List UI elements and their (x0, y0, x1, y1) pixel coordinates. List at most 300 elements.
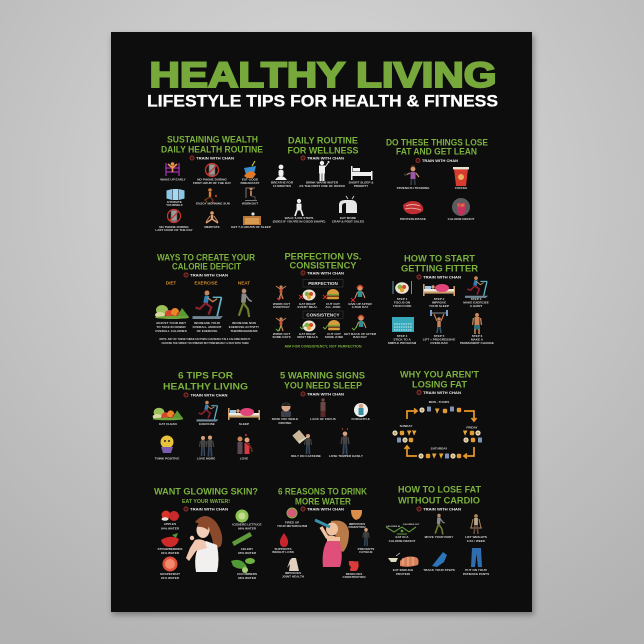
label: BREAKFAST (241, 181, 260, 185)
subtitle: LIFESTYLE TIPS FOR HEALTH & FITNESS (147, 92, 498, 110)
label (348, 522, 366, 529)
brand: TRAIN WITH CHAN (307, 155, 344, 160)
icon: protein (388, 553, 419, 567)
label: 84% WATER (161, 526, 180, 530)
label: 96% WATER (238, 526, 257, 530)
diet text: ADJUST YOUR DIET (156, 321, 186, 325)
icon: no phone night (168, 210, 180, 222)
brand: TRAIN WITH CHAN (422, 158, 458, 163)
label: 95% WATER (238, 551, 257, 555)
label: IMPROVES (285, 571, 301, 575)
column headings: EXERCISE (194, 281, 218, 286)
label (241, 178, 260, 185)
icon: digestion (351, 510, 362, 520)
note (160, 337, 251, 345)
heading: WHY YOU AREN'T (400, 369, 479, 380)
consistency labels: WORK OUT (273, 332, 290, 336)
icon: white bed (351, 166, 372, 180)
label: YOUR METABOLISM (277, 524, 308, 528)
label (273, 216, 325, 224)
panel: sustaining wealth (155, 134, 271, 232)
consistency labels: CUT OUT (327, 332, 341, 336)
icon: two people (200, 436, 214, 456)
step labels row 2: LIFT + PROGRESSIVE (423, 338, 455, 342)
icon: calorie scale: CALORIES IN (386, 525, 400, 528)
subheading: EAT YOUR WATER! (182, 499, 230, 505)
label: saturday: SATURDAY (431, 446, 448, 450)
icon: unfocused person (320, 398, 326, 417)
diet text: TO TAKE IN FEWER (156, 325, 186, 329)
heading: CONSISTENCY (290, 260, 357, 271)
heading (401, 253, 478, 274)
icon: couple (238, 434, 252, 454)
panel: drink more water (272, 486, 374, 579)
label: PROTEIN INTAKE (400, 217, 426, 221)
label: EAT ENOUGH (393, 568, 414, 572)
row 2 labels: LOVE (240, 456, 248, 460)
illustration: drinking woman (315, 520, 349, 567)
panel: lose fat without cardio (386, 484, 489, 576)
heading: FAT AND GET LEAN (396, 146, 477, 157)
heading: DAILY ROUTINE (288, 135, 359, 146)
step labels row 1: STEP 1 (397, 297, 408, 301)
panel: glowing skin (154, 486, 262, 580)
perfection labels (273, 302, 373, 309)
column headings: DIET (166, 281, 176, 286)
label: RESOLVES (346, 572, 362, 576)
step labels row 2: MAKE A (471, 338, 484, 342)
exercise text: OF EXERCISE (197, 329, 217, 333)
column headings: NEAT (238, 281, 250, 286)
label: COFFEE (455, 186, 467, 190)
heading (386, 137, 489, 157)
row 1 labels (159, 422, 249, 426)
panel: daily routine (271, 135, 374, 224)
label: LACK OF FOCUS (310, 417, 336, 421)
label (393, 568, 414, 576)
column headings (166, 281, 250, 286)
heading: CALORIE DEFICIT (172, 261, 241, 272)
icon: vegetables (153, 408, 183, 420)
icon: walker (435, 514, 445, 534)
heading (284, 251, 362, 271)
perfection labels: A BAD DAY (352, 305, 369, 309)
icon: treadmill (465, 276, 488, 298)
label (158, 547, 182, 555)
row 2 labels: LOVE MORE (197, 456, 215, 460)
brand: TRAIN WITH CHAN (423, 274, 461, 279)
neat text: INCREASE NON (232, 321, 257, 325)
callout: AIM FOR CONSISTENCY, NOT PERFECTION (284, 344, 362, 348)
icon: stomach (349, 561, 359, 571)
panel: calorie deficit (155, 252, 260, 345)
icon: positive head (160, 436, 174, 453)
label: RELY ON CAFFEINE (291, 454, 321, 458)
icon: salad (300, 320, 316, 332)
label: ENJOY MORNING SUN (196, 202, 231, 206)
heading: WITHOUT CARDIO (398, 495, 481, 506)
label: PROTEIN (396, 572, 411, 576)
label: DOZE OFF WHILE (272, 417, 298, 421)
icon: lettuce (236, 510, 248, 522)
label: 10 MINUTES (273, 184, 291, 188)
heading: WAYS TO CREATE YOUR (157, 252, 255, 263)
heading: LOSING FAT (412, 379, 467, 390)
icon: calorie deficit: Cal (457, 202, 465, 208)
label: LOSE TEMPER EASILY (329, 454, 364, 458)
label (358, 547, 374, 554)
label: AS THE FIRST ONE OF WATER (299, 184, 346, 188)
icon: strawberries (161, 533, 179, 547)
heading (288, 135, 359, 156)
heading: PERFECTION VS. (284, 251, 362, 262)
exercise text: INCREASE YOUR (194, 321, 221, 325)
label: CALORIE DEFICIT (448, 217, 475, 221)
icon: fatigue person (363, 528, 369, 546)
icon: eat more (339, 196, 357, 213)
step labels row 1: YOUR SLEEP (429, 304, 449, 308)
icon: shoe (432, 552, 447, 567)
icon: drink water (319, 161, 330, 181)
step labels row 1: STEP 3 (471, 297, 482, 301)
panel: 6 tips (153, 370, 260, 460)
label: BREATHE FOR (271, 180, 294, 184)
perfection labels: ALL JUNK (325, 305, 341, 309)
icon: sun figure (205, 188, 217, 203)
illustration: woman (186, 516, 222, 572)
brand: TRAIN WITH CHAN (196, 155, 234, 160)
label (166, 200, 183, 207)
label: APPLES (164, 522, 176, 526)
step labels row 2: OVERLOAD (430, 341, 449, 345)
row 1 labels: SLEEP (239, 422, 249, 426)
heading (157, 252, 255, 272)
icon: wake up (165, 162, 180, 176)
icon: meditate (206, 211, 218, 223)
label: SUPPORTS (274, 547, 292, 551)
neat text: THERMOGENESIS (230, 329, 258, 333)
icon: woman (352, 315, 366, 330)
label (232, 522, 262, 530)
label: CONSTIPATION (343, 575, 366, 579)
heading: HOW TO START (404, 253, 475, 264)
poster (111, 32, 532, 612)
heading: HOW TO LOSE FAT (398, 484, 481, 495)
brand: TRAIN WITH CHAN (307, 391, 344, 396)
label: LIFT WEIGHTS (465, 535, 487, 539)
icon: apples (162, 510, 179, 521)
icon: workout (245, 188, 257, 201)
panel: perfection vs consistency (272, 251, 377, 348)
heading: FOR WELLNESS (288, 145, 359, 156)
icon: protein steak (403, 201, 423, 214)
panel: why not losing fat (392, 369, 482, 459)
perfection box: PERFECTION (308, 281, 338, 286)
title: HEALTHY LIVING (150, 55, 496, 95)
consistency labels: MOST MEALS (297, 335, 318, 339)
label (155, 225, 194, 232)
icon: burger (323, 320, 340, 330)
panel: getting fitter (388, 253, 494, 345)
step labels row 2: PERMANENT CHANGE (460, 341, 494, 345)
label: CRAP & POST SALES (332, 220, 364, 224)
label: JOINT HEALTH (282, 574, 305, 578)
note: NOTE: ANY OF THESE THREE FACTORS CAN RESULT IN A CALORIE DEFICIT. (160, 337, 251, 341)
step labels row 2: SIMPLE PROGRAM (388, 341, 417, 345)
heading: MORE WATER (295, 496, 351, 507)
panel: lose fat and get lean (386, 137, 489, 221)
label: LAST HOUR OF THE DAY (155, 228, 194, 232)
heading: SUSTAINING WEALTH (167, 134, 258, 145)
arrow: top left (407, 408, 417, 419)
food row: weekdays (419, 406, 461, 414)
consistency labels: EAT RIGHT (299, 332, 316, 336)
label: EAT MORE (340, 216, 356, 220)
icon: knee (287, 558, 299, 571)
label (160, 572, 180, 580)
icon: walker (239, 289, 252, 317)
label: CUCUMBERS (237, 572, 257, 576)
icon: tired face (281, 402, 291, 417)
panel: warning signs (272, 370, 371, 458)
diet text (155, 321, 187, 333)
heading: DAILY HEALTH ROUTINE (161, 144, 264, 155)
icon: barbell lifter (430, 310, 448, 333)
label: SHORT SLEEP & (349, 180, 374, 184)
perfection labels: EVERYDAY (273, 305, 291, 309)
label: GRAPEFRUIT (160, 572, 180, 576)
step labels row 1 (393, 297, 489, 308)
icon: calorie scale (386, 523, 420, 534)
icon: metabolism (287, 508, 297, 518)
icon: celery (233, 534, 251, 544)
label: DRINK WARM WATER (306, 180, 339, 184)
icon: sleep (243, 212, 261, 225)
label (282, 571, 305, 578)
step labels row 1: YOUR FOOD (393, 304, 412, 308)
poster shadow (112, 35, 534, 615)
icon: calendar (392, 317, 414, 332)
brand: TRAIN WITH CHAN (190, 272, 228, 277)
heading (163, 370, 248, 392)
step labels row 1: MAKE EXERCISE (463, 300, 489, 304)
label: NO PHONE DURING (159, 225, 189, 229)
icon: fit man (472, 313, 482, 334)
label: MOVE YOUR BODY (425, 535, 454, 539)
label: WORKOUT (242, 202, 258, 206)
food group: friday (463, 430, 482, 443)
label: mon-thurs: MON - THURS (429, 400, 449, 404)
label: DIGESTION (348, 525, 366, 529)
row 2 labels (155, 456, 248, 460)
heading: 6 REASONS TO DRINK (278, 486, 367, 497)
heading (161, 134, 264, 155)
arrow: bottom right (464, 447, 474, 458)
label: HYDRATE (167, 200, 182, 204)
icon: treadmill (196, 401, 219, 421)
heading: 5 WARNING SIGNS (280, 370, 366, 381)
consistency labels (272, 332, 377, 339)
row 1 labels: EXERCISE (199, 422, 215, 426)
icon: hydrate (166, 189, 184, 200)
arrow: bottom left (404, 446, 417, 456)
icon: treadmill (192, 290, 223, 319)
label (343, 572, 366, 579)
heading (278, 486, 367, 507)
icon: plate (393, 281, 412, 294)
diet text: OVERALL CALORIES (155, 329, 187, 333)
perfection labels: GIVE UP AFTER (348, 302, 373, 306)
row 1 labels: EAT CLEAN (159, 422, 177, 426)
icon: pants (471, 548, 482, 567)
icon: calorie scale: CALORIES OUT (403, 523, 420, 526)
brand: TRAIN WITH CHAN (307, 506, 344, 511)
label (272, 547, 294, 554)
brand: TRAIN WITH CHAN (423, 390, 461, 395)
label: 96% WATER (238, 576, 257, 580)
heading: HEALTHY LIVING (163, 381, 248, 392)
label (389, 535, 416, 543)
food row: saturday (418, 453, 461, 459)
label: WALK 5,000 STEPS (285, 216, 313, 220)
label: STRENGTH TRAINING (397, 186, 430, 190)
icon: boxer (276, 317, 286, 331)
label (299, 180, 346, 188)
consistency box: CONSISTENCY (306, 312, 340, 318)
heading (398, 484, 481, 506)
step labels row 1: FOCUS ON (394, 300, 411, 304)
perfection labels: CUT OUT (326, 302, 340, 306)
label: FIRES UP (285, 520, 299, 524)
perfection labels: WORK OUT (273, 302, 290, 306)
icon: forgetful (354, 403, 368, 417)
step labels row 1: STEP 2 (434, 297, 445, 301)
icon: strength woman (404, 166, 419, 185)
label: GET 7-9 HOURS OF SLEEP (231, 225, 271, 229)
label (237, 572, 257, 580)
icon: temper (341, 428, 349, 454)
icon: breakfast (244, 161, 256, 178)
neat text (229, 321, 260, 333)
label (277, 520, 308, 528)
label (349, 180, 374, 188)
step labels row 2: STEP 4 (397, 334, 408, 338)
icon: vegetables (155, 305, 189, 319)
label: TRACK YOUR STEPS (423, 568, 455, 572)
label (465, 535, 487, 543)
label (332, 216, 364, 224)
brand: TRAIN WITH CHAN (190, 392, 228, 397)
label (271, 180, 294, 188)
step labels row 2: STEP 5 (434, 334, 445, 338)
label: sunday: SUNDAY (400, 424, 413, 428)
brand: TRAIN WITH CHAN (423, 506, 461, 511)
brand: TRAIN WITH CHAN (307, 270, 344, 275)
icon: bed (423, 284, 455, 296)
heading: YOU NEED SLEEP (284, 380, 363, 391)
icon: drop (280, 533, 288, 547)
row 2 labels: THINK POSITIVE (155, 456, 179, 460)
icon: bed (228, 408, 260, 420)
label (463, 568, 489, 576)
step labels row 2: STEP 6 (472, 334, 483, 338)
consistency labels: GET BACK UP AFTER (344, 332, 377, 336)
label: MEDITATE (204, 225, 220, 229)
step labels row 1: IMPROVE (432, 300, 446, 304)
icon: no phone (206, 164, 218, 176)
label: 91% WATER (161, 551, 180, 555)
label: WEIGHT LOSS (272, 550, 294, 554)
label: 3-5X / WEEK (467, 539, 486, 543)
heading: 6 TIPS FOR (178, 370, 233, 381)
icon: lifter (470, 514, 482, 534)
neat text: EXERCISE ACTIVITY (229, 325, 260, 329)
perfection labels: EVERY MEAL (298, 305, 318, 309)
exercise text: OVERALL AMOUNT (192, 325, 222, 329)
label: CALORIE DEFICIT (389, 539, 416, 543)
label: YOURSELF (166, 203, 183, 207)
label: DRIVING (279, 421, 292, 425)
perfection labels: EAT RIGHT (299, 302, 316, 306)
heading (400, 369, 479, 390)
label: IMPROVES (349, 522, 365, 526)
label: STRAWBERRIES (158, 547, 182, 551)
label: PATIENCE PANTS (463, 572, 489, 576)
label (238, 547, 257, 555)
food group: sunday (392, 430, 416, 443)
label: FATIGUE (359, 550, 373, 554)
label: WAKE UP EARLY (160, 178, 187, 182)
heading: GETTING FITTER (401, 263, 478, 274)
exercise text (192, 321, 222, 333)
label: PREVENTS (358, 547, 374, 551)
step labels row 2: STICK TO A (393, 338, 411, 342)
icon: walk (295, 199, 303, 216)
label: PUT ON YOUR (465, 568, 487, 572)
step labels row 1: A HABIT (470, 304, 482, 308)
consistency labels: SOME JUNK (325, 335, 344, 339)
label (193, 178, 232, 185)
label: FORGETFUL (352, 417, 371, 421)
icon: breathe (275, 165, 287, 180)
icon: boxer (276, 285, 286, 300)
label: friday: FRIDAY (466, 426, 479, 430)
consistency labels: SOME DAYS (272, 335, 291, 339)
consistency labels: BAD DAY (353, 335, 368, 339)
step labels row 2 (388, 334, 494, 345)
icon: caffeine (292, 430, 312, 454)
icon: grapefruit (162, 556, 178, 572)
label (161, 522, 180, 530)
label: EAT GOOD (242, 178, 259, 182)
label: CELERY (241, 547, 254, 551)
icon: salad (299, 290, 316, 300)
heading: WANT GLOWING SKIN? (154, 486, 258, 497)
heading: DO THESE THINGS LOSE (386, 137, 489, 148)
label: ICEBERG LETTUCE (232, 522, 262, 526)
note: CHOOSE THE SPEED YOU PREFER BUT PREFERABLY A DUO WITH THEM (162, 341, 249, 345)
label (272, 417, 298, 425)
label: NO PHONE DURING (197, 178, 227, 182)
arrow: top right (464, 411, 476, 421)
icon: woman (351, 285, 365, 302)
icon: coffee (453, 167, 469, 186)
heading (280, 370, 366, 391)
icon: cucumbers (231, 558, 255, 573)
label: 91% WATER (161, 576, 180, 580)
label: EAT IN A (396, 535, 409, 539)
label: FIRST HOUR OF THE DAY (193, 181, 232, 185)
